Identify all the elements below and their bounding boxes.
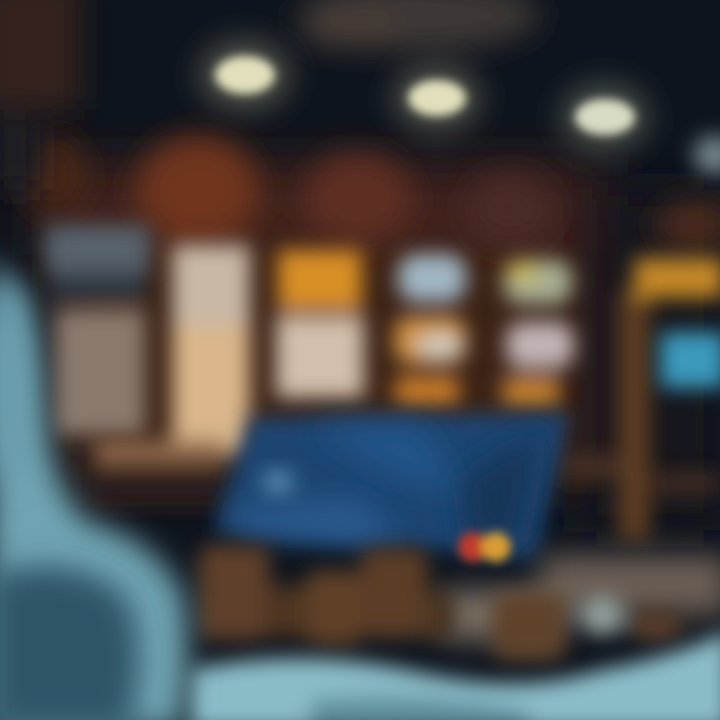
credit card xyxy=(214,412,570,558)
center column panels xyxy=(394,254,466,406)
right column panels xyxy=(502,260,574,408)
foreground cloth xyxy=(190,630,720,720)
wall band xyxy=(40,165,720,530)
card logo xyxy=(458,532,511,562)
ceiling lights xyxy=(199,39,720,175)
cream panel xyxy=(85,245,250,506)
coin stacks xyxy=(198,545,683,660)
right wooden post and sign xyxy=(560,258,720,540)
foreground figure xyxy=(0,255,188,720)
orange and cream panel xyxy=(276,250,364,398)
left dark figure xyxy=(0,0,80,190)
gray sign panel xyxy=(45,225,150,435)
ceiling fixture xyxy=(300,0,540,51)
floor xyxy=(440,555,720,640)
blue screen xyxy=(660,332,720,388)
brown arches xyxy=(23,135,720,250)
